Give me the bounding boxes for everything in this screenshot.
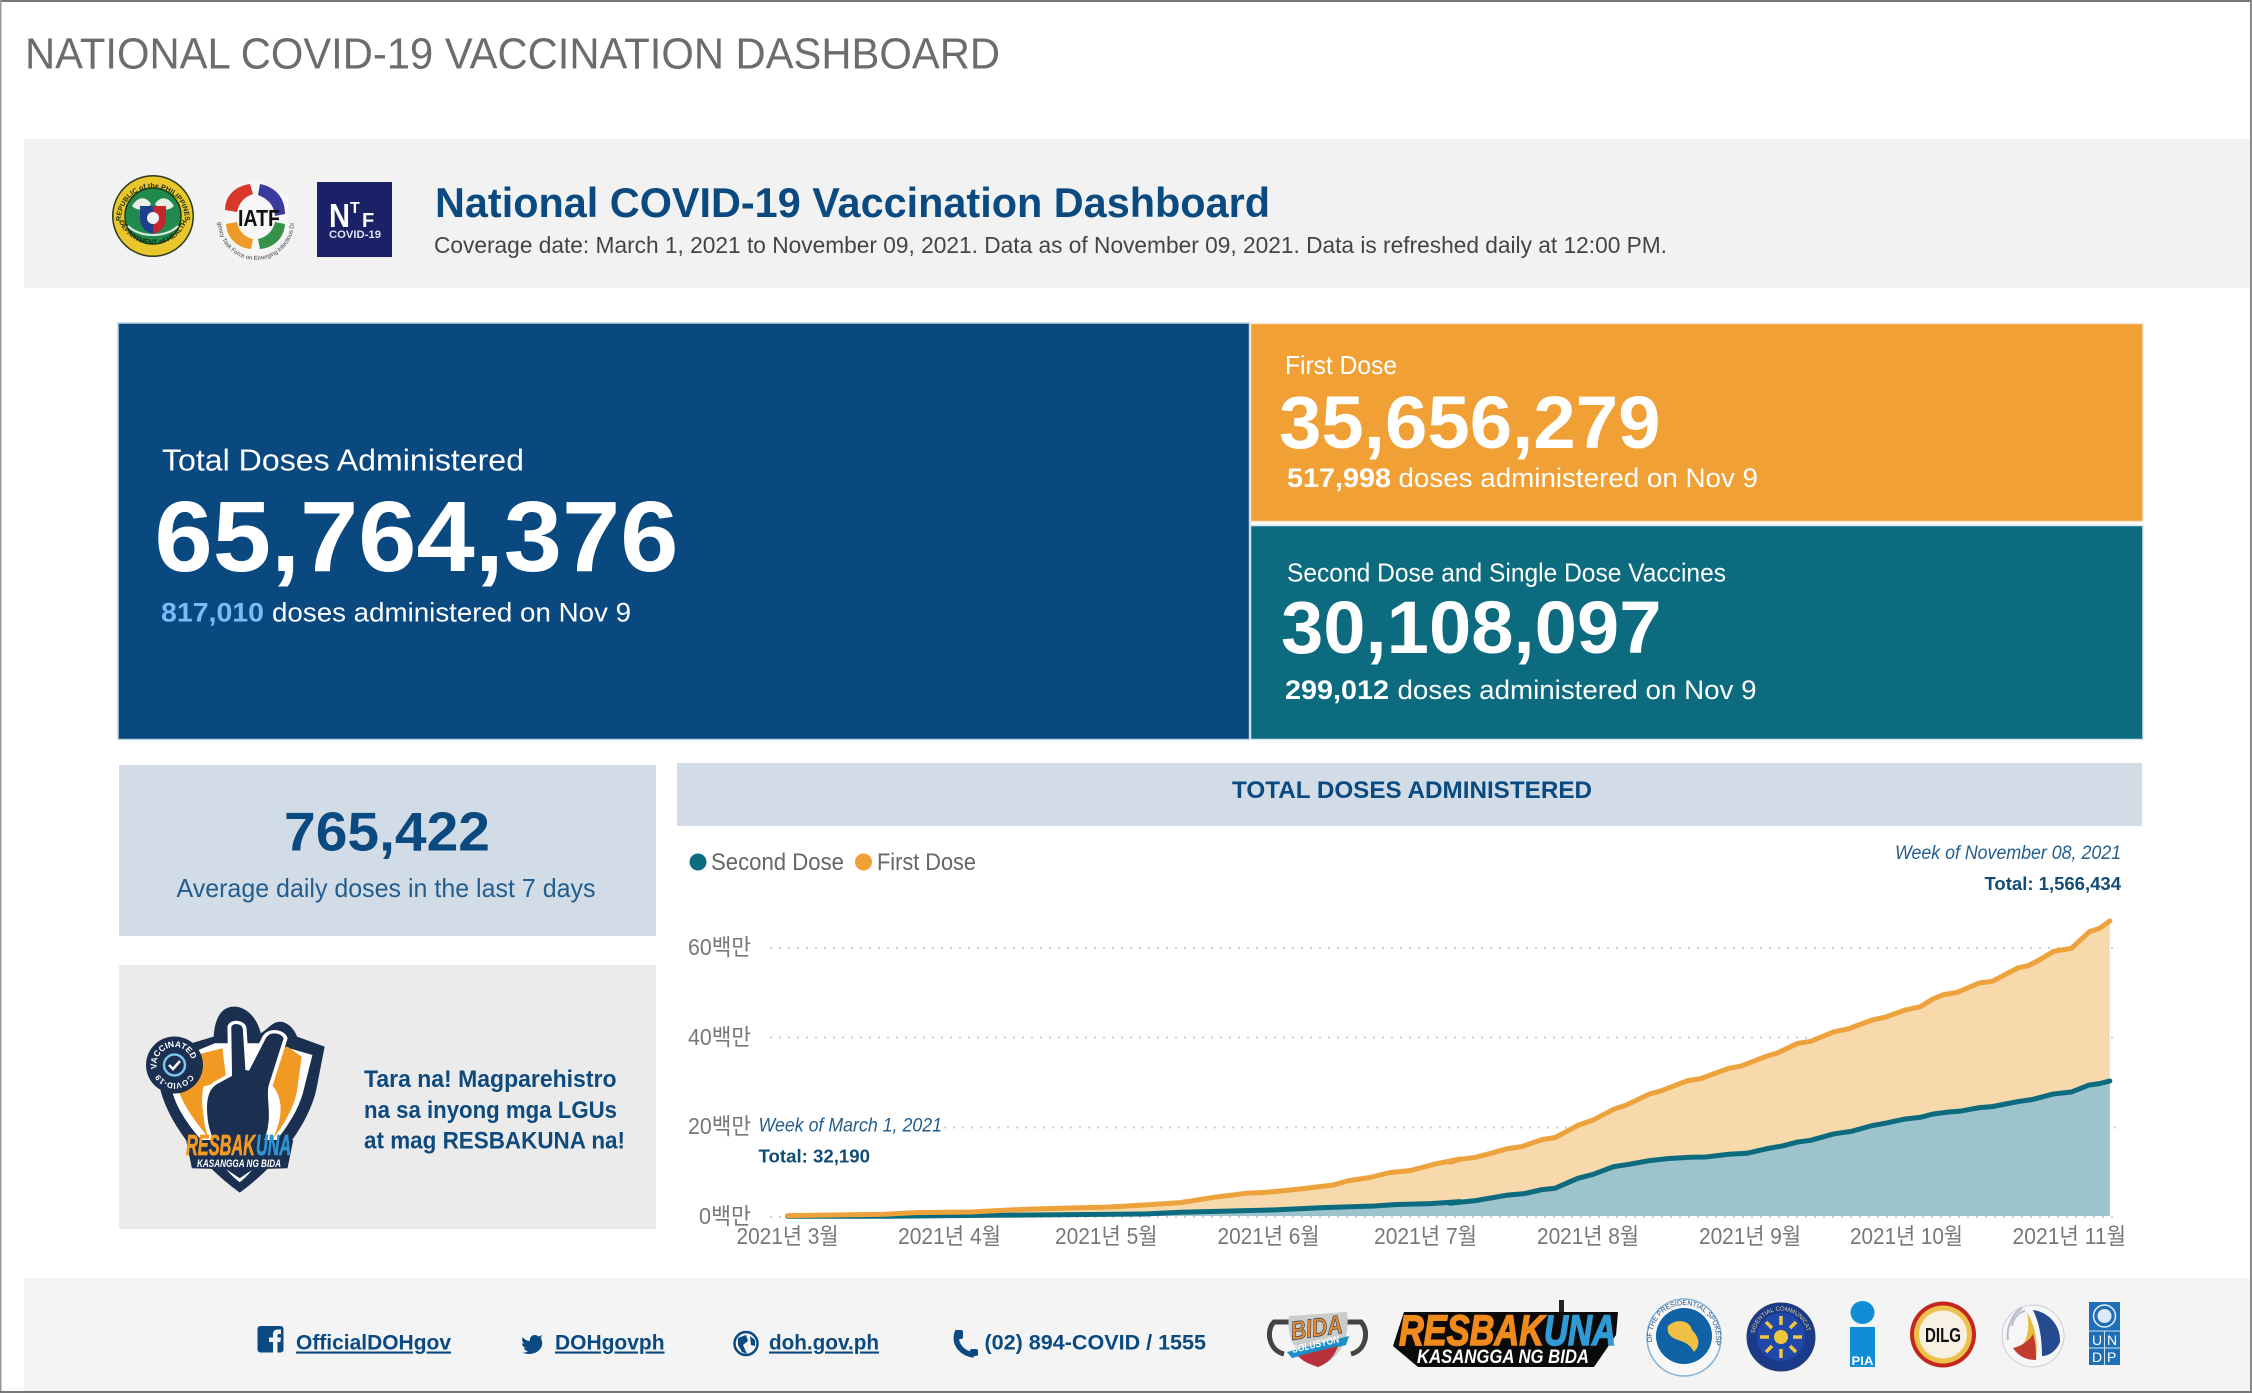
logo: UNDP: N <box>2107 1332 2117 1348</box>
number: total doses: 65,764,376 <box>154 481 678 593</box>
legend: First Dose <box>877 849 976 876</box>
area chart: cumulative doses <box>788 921 2110 1216</box>
x axis labels: 2021년 10월 <box>1850 1223 1963 1249</box>
icon: Resbakuna shield: KASANGGA NG BIDA <box>197 1158 281 1170</box>
daily doses: total: 817,010 <box>161 598 264 628</box>
panel: average daily doses <box>119 765 656 936</box>
call to action text: Tara na! Magparehistro <box>364 1066 616 1093</box>
y axis labels: 40백만 <box>688 1024 751 1050</box>
x axis labels: 2021년 11월 <box>2012 1223 2126 1249</box>
logo: BIDA Solusyon <box>1269 1309 1366 1367</box>
logo: Department of Health seal: DEPARTMENT of HEALTH <box>119 220 187 244</box>
number: average: 765,422 <box>284 800 490 862</box>
logo: PIA: PIA <box>1852 1354 1874 1368</box>
logo: DILG: DILG <box>1925 1325 1961 1347</box>
call to action text: na sa inyong mga LGUs <box>364 1097 617 1124</box>
call to action text: at mag RESBAKUNA na! <box>364 1128 625 1154</box>
logo: UNDP <box>2089 1302 2120 1365</box>
daily doses: total: doses administered on Nov 9 <box>272 598 631 628</box>
logo: Resbakuna Kasangga ng Bida: UNA <box>1544 1307 1616 1355</box>
y axis labels <box>688 934 751 1229</box>
legend: Second Dose <box>711 849 844 876</box>
number: first dose: 35,656,279 <box>1279 381 1660 464</box>
annotation: latest week <box>1895 843 2122 894</box>
logo: IATF: IATF <box>238 205 280 231</box>
logo: Department of Health seal: REPUBLIC of the PHILIPPINES <box>116 182 190 221</box>
icon: Resbakuna shield <box>146 1006 325 1193</box>
chart header: TOTAL DOSES ADMINISTERED <box>1232 777 1592 804</box>
contact: website: doh.gov.ph <box>769 1332 879 1354</box>
logo: UNDP: U <box>2092 1332 2102 1348</box>
daily doses: second dose: doses administered on Nov 9 <box>1398 675 1756 705</box>
label: total doses: Total Doses Administered <box>162 442 524 478</box>
logo: UNDP: P <box>2107 1349 2116 1365</box>
label: first dose: First Dose <box>1285 350 1397 380</box>
x axis labels: 2021년 4월 <box>898 1223 1001 1249</box>
x axis labels: 2021년 9월 <box>1699 1223 1801 1249</box>
annotation: latest week: Week of November 08, 2021 <box>1895 843 2121 864</box>
header band <box>24 139 2250 288</box>
panel: second dose <box>1250 526 2143 740</box>
call to action text <box>364 1066 625 1154</box>
logo: PIA <box>1850 1301 1875 1368</box>
x axis labels: 2021년 6월 <box>1218 1223 1320 1249</box>
logo: Department of Health seal <box>112 175 194 257</box>
number: second dose: 30,108,097 <box>1281 586 1662 669</box>
dashboard heading: National COVID-19 Vaccination Dashboard <box>435 179 1270 226</box>
y axis labels: 60백만 <box>688 934 751 960</box>
panel: first dose <box>1250 324 2143 522</box>
logo: NTF COVID-19: F <box>362 210 374 232</box>
contact: phone: (02) 894-COVID / 1555 <box>984 1332 1206 1354</box>
daily doses: second dose: 299,012 <box>1285 675 1389 705</box>
contact: Twitter: DOHgovph <box>555 1332 664 1354</box>
legend <box>690 849 976 876</box>
coverage date text: Coverage date: March 1, 2021 to November 09, 2021. Data as of November 09, 2021. Data is refreshed daily at 12:00 PM. <box>434 232 1667 258</box>
panel: total doses chart <box>677 763 2142 1249</box>
logo: BIDA Solusyon: BIDA <box>1289 1309 1344 1346</box>
panel: total doses administered <box>118 323 1250 740</box>
logo: UNDP: D <box>2092 1349 2102 1365</box>
logo: NTF COVID-19: COVID-19 <box>329 229 381 241</box>
contact: Facebook <box>258 1326 451 1354</box>
icon: Resbakuna shield: VACCINATED <box>150 1041 196 1070</box>
annotation: first week <box>758 1116 942 1166</box>
icon: Resbakuna shield: COVID-19 <box>156 1075 194 1089</box>
logo: Office of the Presidential Spokesperson <box>1646 1298 1722 1377</box>
annotation: first week: Total: 32,190 <box>758 1146 870 1166</box>
x axis labels: 2021년 8월 <box>1537 1223 1639 1249</box>
logo: IATF <box>216 184 294 260</box>
x axis labels: 2021년 7월 <box>1374 1223 1477 1249</box>
daily doses: first dose: 517,998 <box>1287 463 1391 493</box>
x axis labels: 2021년 5월 <box>1055 1223 1158 1249</box>
page title: NATIONAL COVID-19 VACCINATION DASHBOARD <box>25 30 1000 78</box>
icon: Resbakuna shield: UNA <box>256 1130 291 1162</box>
x axis labels: 2021년 3월 <box>736 1223 838 1249</box>
logo: Presidential Communications: PRESIDENTIAL COMMUNICATIONS <box>1750 1306 1811 1334</box>
icon: Resbakuna shield: RESBAK <box>186 1130 256 1162</box>
logo: IATF: Inter-Agency Task Force on Emerging Infectious Diseases <box>216 222 294 260</box>
x axis labels <box>736 1223 2126 1249</box>
annotation: latest week: Total: 1,566,434 <box>1984 873 2122 894</box>
contact: Facebook: OfficialDOHgov <box>296 1332 451 1354</box>
label: average: Average daily doses in the last 7 days <box>176 873 596 903</box>
logo: BIDA Solusyon: SOLUSYON <box>1291 1334 1341 1356</box>
logo: Resbakuna Kasangga ng Bida: KASANGGA NG BIDA <box>1417 1347 1589 1368</box>
logo: Resbakuna Kasangga ng Bida: RESBAK <box>1399 1307 1546 1355</box>
logo: Resbakuna Kasangga ng Bida <box>1393 1300 1618 1368</box>
y axis labels: 20백만 <box>688 1113 751 1139</box>
label: second dose: Second Dose and Single Dose Vaccines <box>1287 558 1726 588</box>
annotation: first week: Week of March 1, 2021 <box>758 1116 942 1136</box>
logo: Office of the Presidential Spokesperson: OFFICE OF THE PRESIDENTIAL SPOKESPERSON <box>1647 1300 1721 1346</box>
logo: DILG <box>1910 1302 1976 1368</box>
chart header <box>677 763 2142 826</box>
logo: NTF COVID-19: N <box>329 197 350 234</box>
panel: Resbakuna call to action <box>119 965 656 1229</box>
logo: Presidential Communications <box>1746 1302 1816 1372</box>
daily doses: first dose: doses administered on Nov 9 <box>1398 463 1758 493</box>
logo: NTF COVID-19 <box>317 182 392 257</box>
y axis labels: 0백만 <box>699 1203 751 1229</box>
logo: NTF COVID-19: T <box>350 200 360 217</box>
logo: anniversary seal <box>2002 1305 2064 1367</box>
